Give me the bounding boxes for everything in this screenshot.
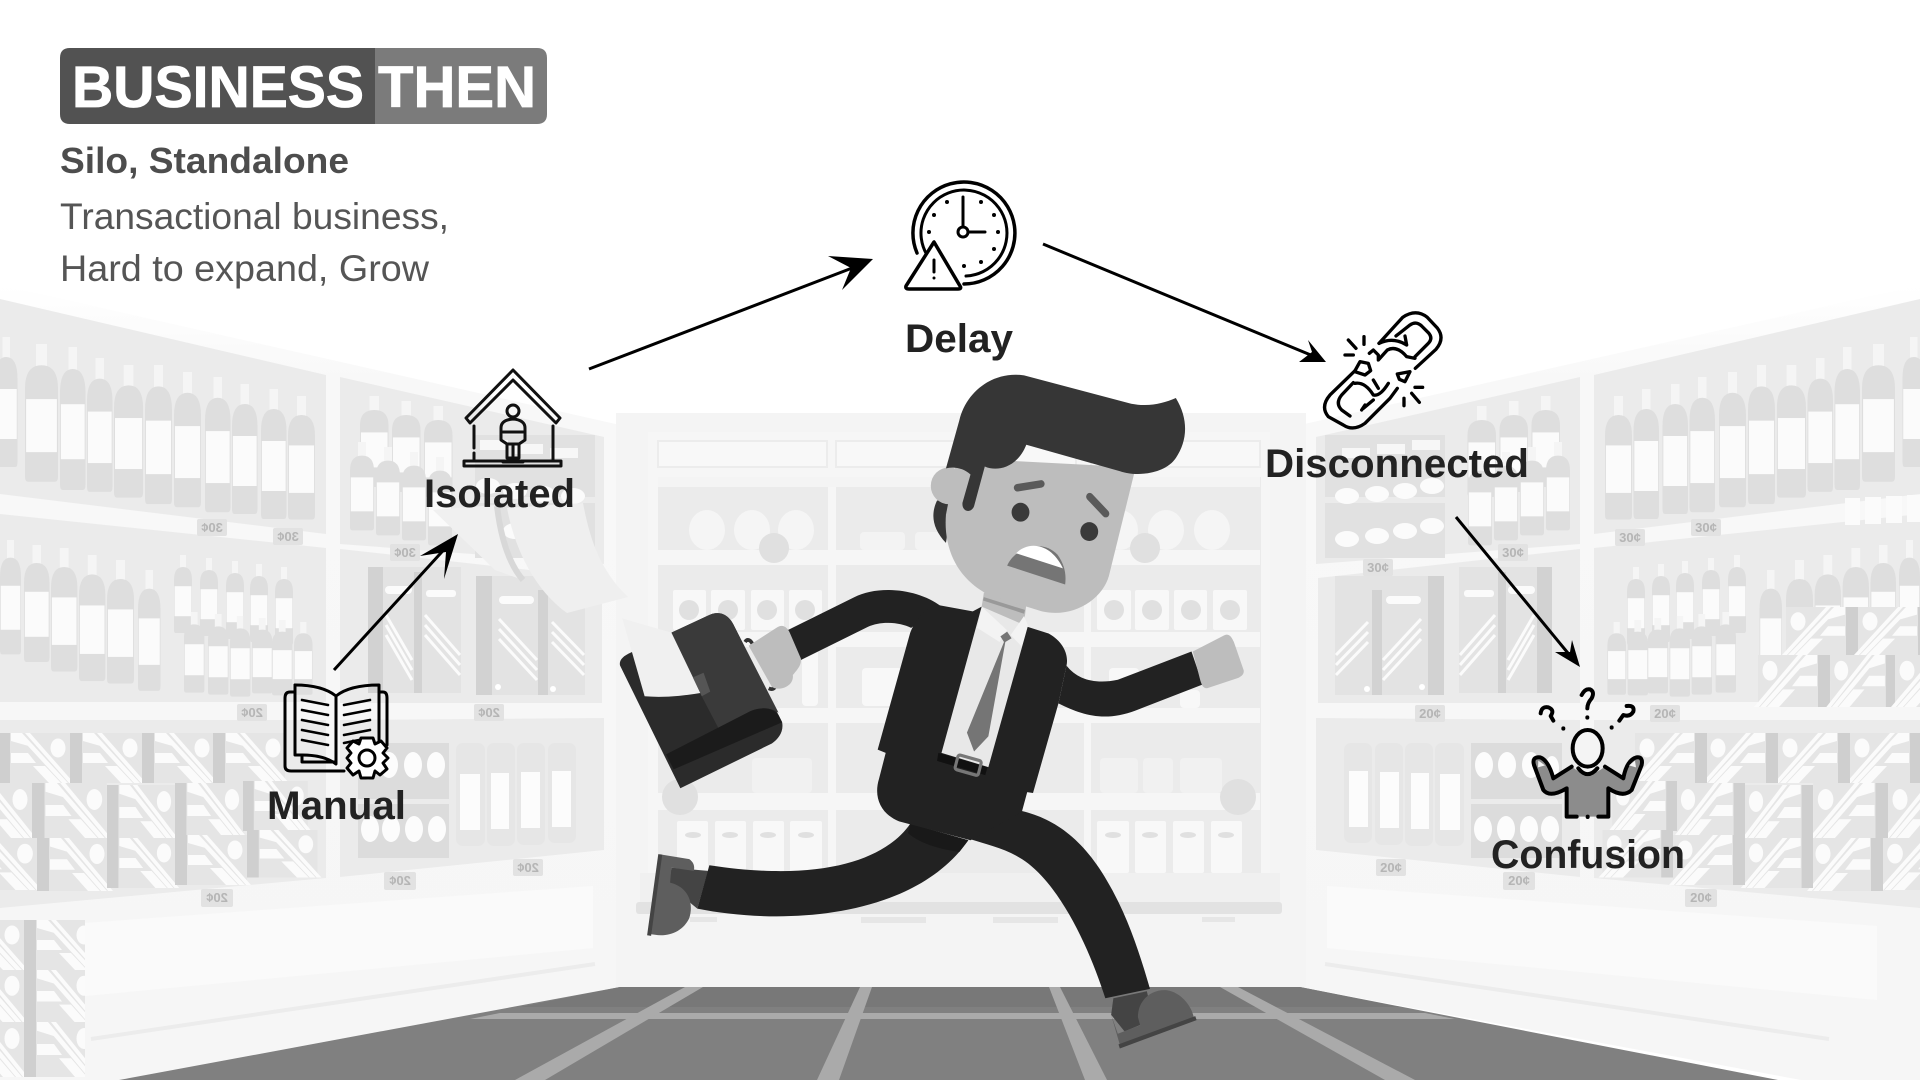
price tags: 30¢ (394, 545, 416, 560)
price tags: 20¢ (241, 705, 263, 720)
price tags: 20¢ (1380, 860, 1402, 875)
ghost flying paper (433, 503, 628, 613)
icon: broken chain (1325, 313, 1441, 428)
icon: manual book with gear (285, 685, 388, 778)
label: Delay: Delay (905, 317, 1014, 361)
tie (967, 632, 1012, 751)
price tags: 20¢ (1508, 873, 1530, 888)
label: Manual: Manual (267, 784, 406, 828)
background: left shelf wall (0, 285, 620, 1080)
description text (60, 196, 449, 289)
back arm (787, 590, 941, 660)
price tags (197, 519, 1721, 907)
back leg and shoe (649, 824, 968, 936)
floor tiles (119, 987, 1778, 1080)
label: Confusion: Confusion (1491, 833, 1685, 877)
price tags: 20¢ (478, 705, 500, 720)
title badge (60, 48, 547, 124)
right hand (1193, 635, 1244, 688)
description text: Hard to expand, Grow (60, 248, 429, 289)
price tags: 30¢ (201, 520, 223, 535)
shirt and collar (941, 607, 1029, 767)
left hand (749, 626, 801, 689)
label: Isolated: Isolated (424, 472, 575, 516)
price tags: 30¢ (1619, 530, 1641, 545)
title badge: BUSINESS (72, 55, 364, 120)
arrow: manual to isolated (334, 534, 458, 670)
arrow: disconnected to confusion (1456, 517, 1580, 667)
price tags: 30¢ (1695, 520, 1717, 535)
background: right shelf wall (1300, 285, 1920, 1080)
arrow: delay to disconnected (1043, 244, 1326, 362)
subtitle: Silo, Standalone (60, 140, 349, 181)
price tags: 30¢ (1502, 545, 1524, 560)
belt (937, 753, 987, 776)
price tags: 20¢ (1690, 890, 1712, 905)
price tags: 20¢ (1654, 706, 1676, 721)
neck (982, 592, 1026, 630)
icon: clock with warning (906, 182, 1015, 289)
price tags: 20¢ (206, 890, 228, 905)
head (931, 375, 1185, 613)
description text: Transactional business, (60, 196, 449, 237)
price tags: 20¢ (1419, 706, 1441, 721)
price tags: 30¢ (277, 529, 299, 544)
label: Disconnected: Disconnected (1265, 442, 1529, 486)
front leg and shoe (971, 811, 1196, 1046)
price tags: 30¢ (1367, 560, 1389, 575)
arrow: isolated to delay (589, 256, 873, 369)
right arm (1058, 651, 1203, 717)
jacket (877, 605, 1067, 840)
title badge: THEN (378, 55, 536, 120)
background: upper right extra boxes and labels (1754, 495, 1920, 707)
icon: confused person (1533, 689, 1642, 817)
background: lower left hatched boxes (0, 920, 85, 1077)
background: center shelf unit (616, 413, 1306, 987)
price tags: 20¢ (389, 873, 411, 888)
running businessman (620, 375, 1244, 1046)
price tags: 20¢ (517, 860, 539, 875)
briefcase (620, 613, 782, 788)
icon: isolated house (464, 370, 561, 466)
